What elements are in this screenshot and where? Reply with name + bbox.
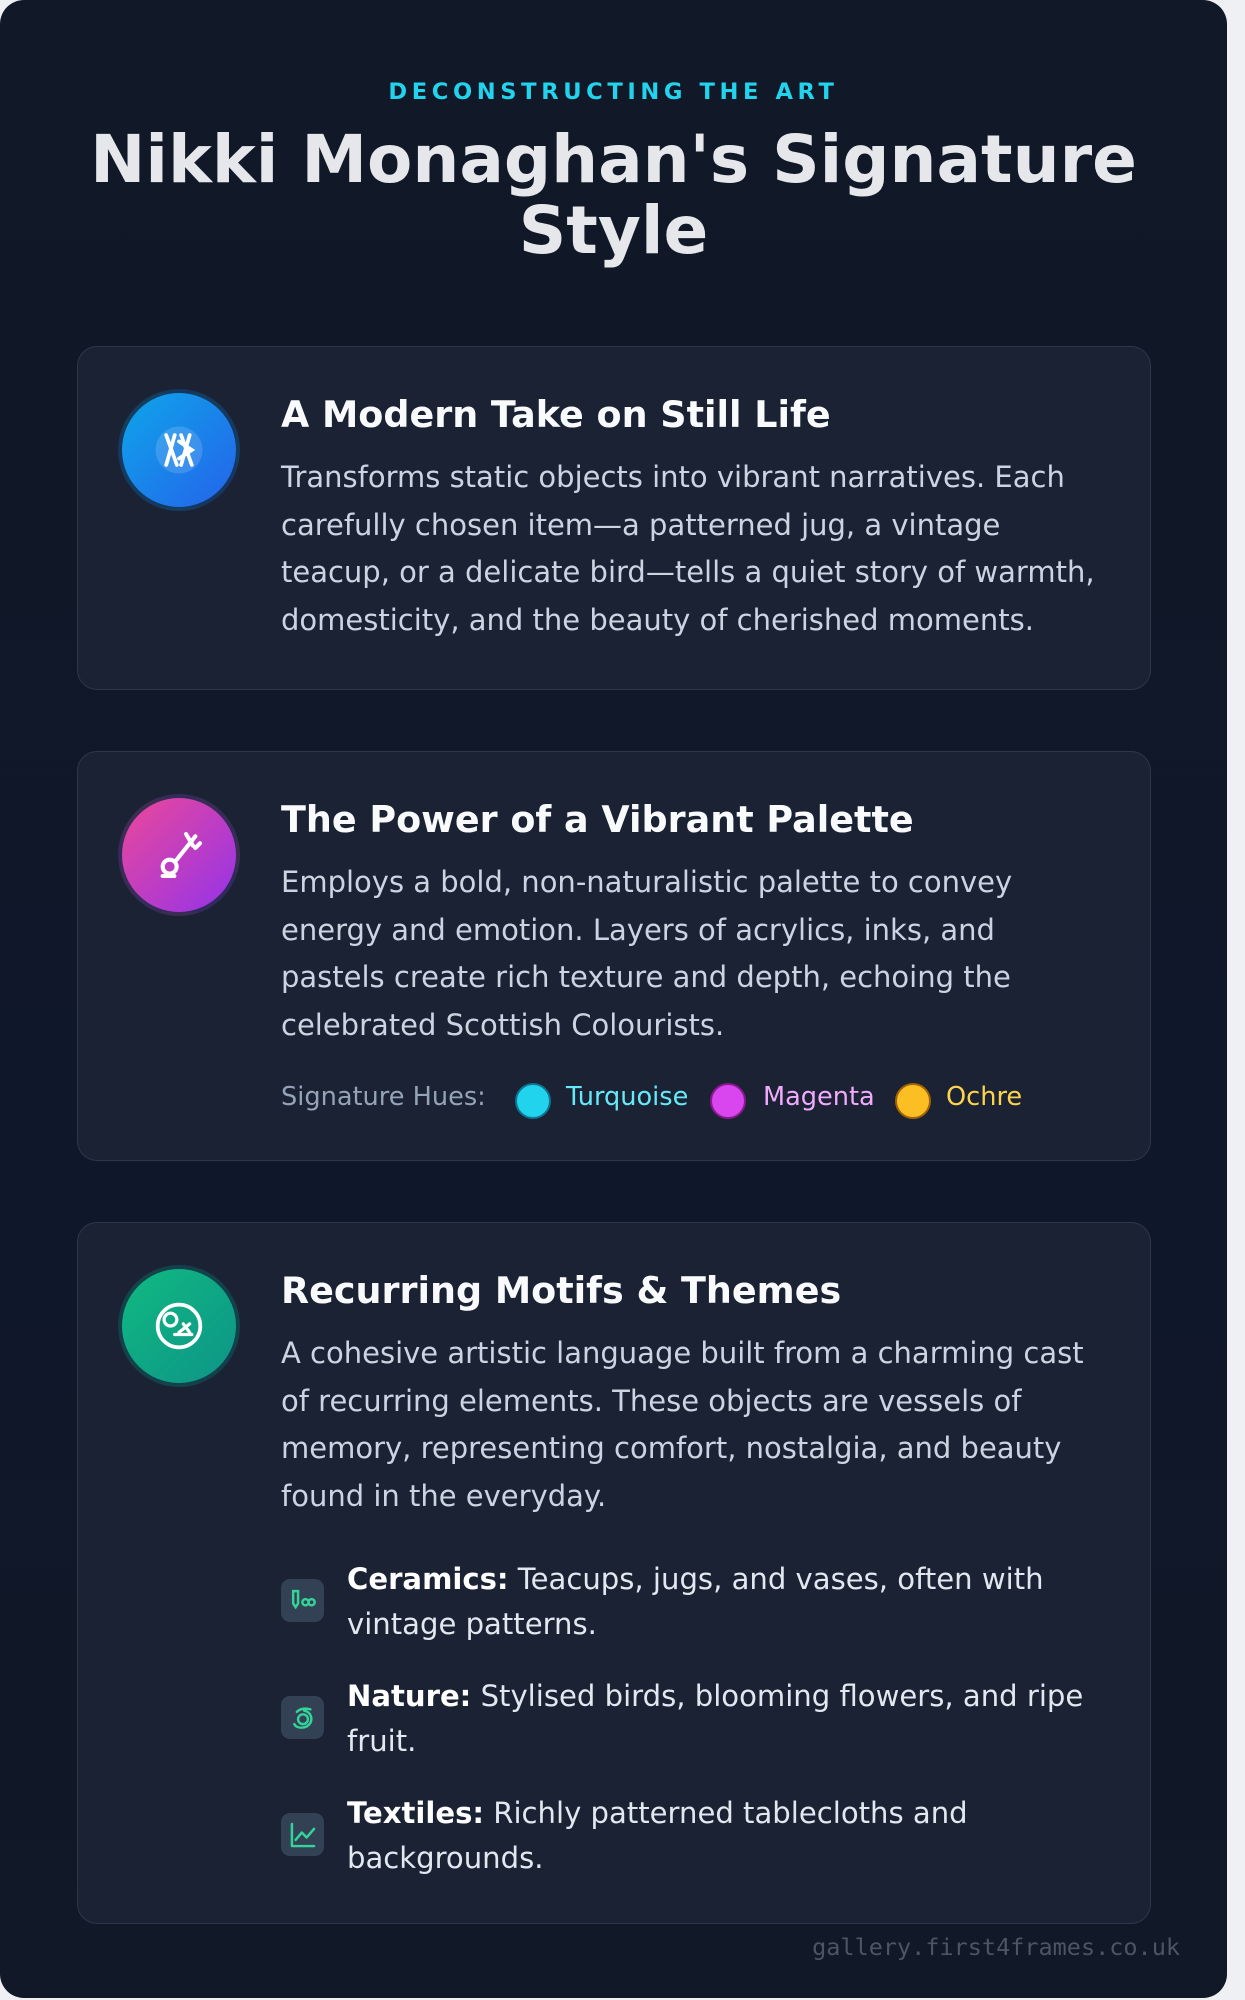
body text: of recurring elements. These objects are vessels of [281, 1384, 1021, 1418]
footer url: gallery.first4frames.co.uk [812, 1933, 1180, 1961]
list item: textiles: Textiles: Richly patterned tablecloths and [347, 1796, 968, 1830]
signature hues legend: Ochre [946, 1082, 1022, 1112]
signature hues legend: Signature Hues: [281, 1082, 486, 1112]
body text [281, 1336, 1084, 1512]
icon: textiles [281, 1813, 324, 1856]
body text: A cohesive artistic language built from a charming cast [281, 1336, 1084, 1370]
panel: still life [77, 346, 1151, 690]
body text: domesticity, and the beauty of cherished moments. [281, 602, 1034, 636]
body text: Employs a bold, non-naturalistic palette to convey [281, 865, 1012, 899]
icon: motifs [118, 1265, 240, 1387]
body text [280, 460, 1095, 636]
list item: nature: fruit. [347, 1724, 416, 1758]
icon: nature [281, 1696, 324, 1739]
panel: palette [77, 751, 1151, 1161]
list item: nature: Nature: Stylised birds, blooming flowers, and ripe [347, 1679, 1083, 1713]
signature hues legend: Turquoise [566, 1082, 688, 1112]
body text: carefully chosen item—a patterned jug, a vintage [281, 508, 1000, 542]
body text: celebrated Scottish Colourists. [281, 1008, 724, 1042]
signature hues legend: Magenta [763, 1082, 875, 1112]
list item: ceramics [281, 1562, 1044, 1641]
body text: pastels create rich texture and depth, echoing the [281, 960, 1011, 994]
list item: textiles [281, 1796, 968, 1875]
icon: still life [118, 389, 240, 511]
body text: Transforms static objects into vibrant narratives. Each [281, 460, 1065, 494]
body text: memory, representing comfort, nostalgia, and beauty [281, 1431, 1061, 1465]
heading: The Power of a Vibrant Palette [281, 798, 914, 841]
signature hues legend [281, 1082, 1022, 1119]
subtitle: DECONSTRUCTING THE ART [388, 79, 839, 105]
list item: nature [281, 1679, 1083, 1758]
body text: teacup, or a delicate bird—tells a quiet story of warmth, [281, 555, 1095, 589]
heading: A Modern Take on Still Life [281, 393, 831, 436]
list item: textiles: backgrounds. [347, 1841, 543, 1875]
body text: energy and emotion. Layers of acrylics, inks, and [281, 912, 995, 946]
list item: ceramics: Ceramics: Teacups, jugs, and vases, often with [347, 1562, 1044, 1596]
list item: ceramics: vintage patterns. [347, 1607, 597, 1641]
body text: found in the everyday. [281, 1478, 606, 1512]
icon: ceramics [281, 1579, 324, 1622]
heading: Recurring Motifs & Themes [281, 1269, 841, 1312]
body text [281, 865, 1012, 1042]
title: Nikki Monaghan's Signature [90, 121, 1137, 198]
icon: brush [118, 794, 240, 916]
panel: motifs [77, 1222, 1151, 1924]
title: Style [519, 192, 708, 269]
title [90, 121, 1137, 269]
